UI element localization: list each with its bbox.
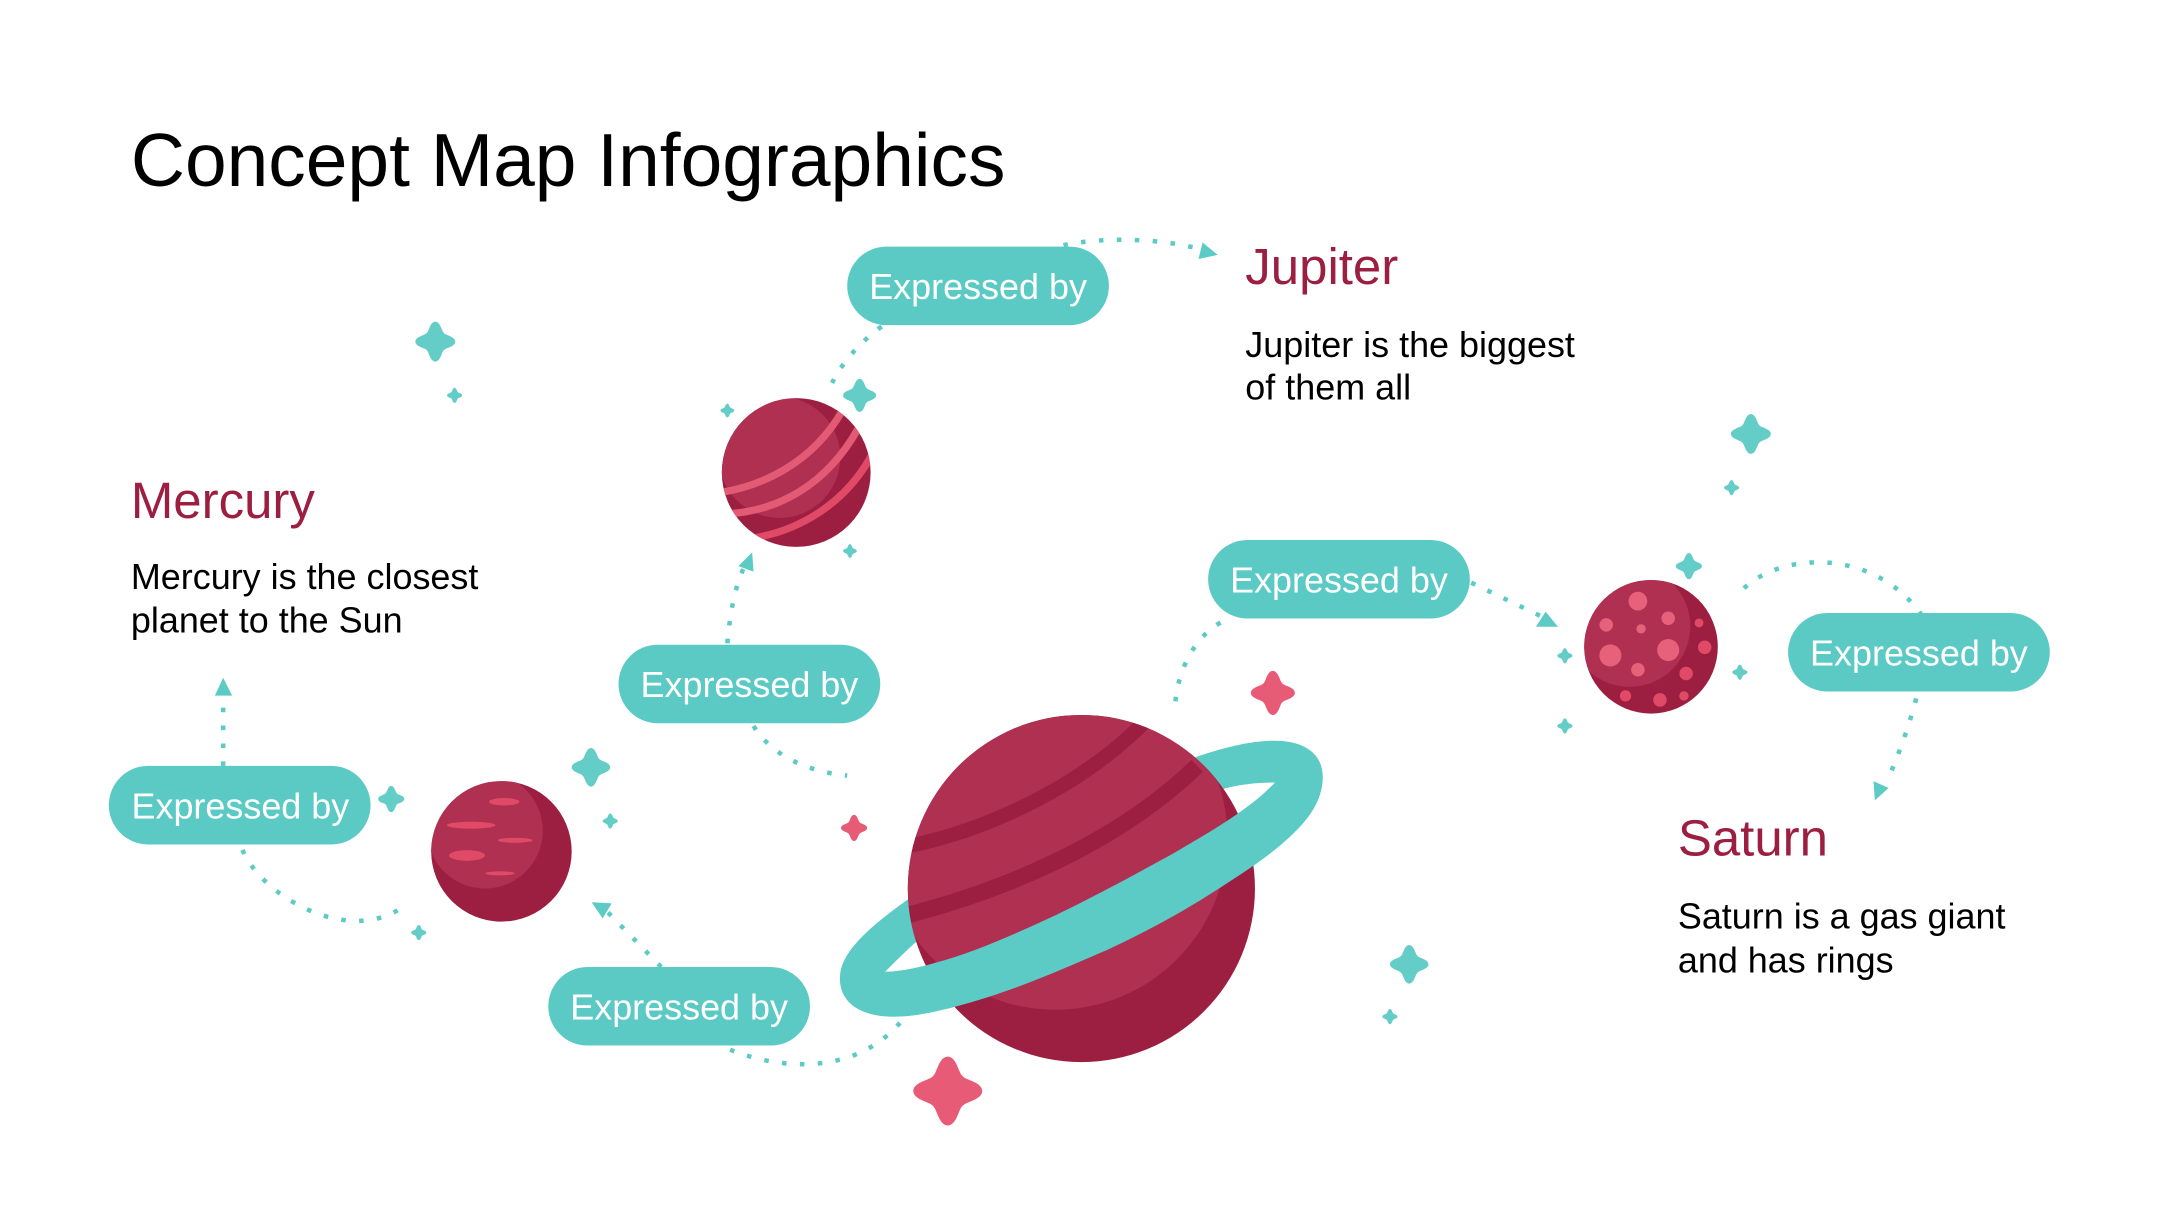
arrow: top pill to Jupiter text [1063, 240, 1218, 259]
pill: Mercury: Expressed by [132, 785, 349, 826]
ring: front band [840, 777, 1323, 1017]
planet: main ringed planet [840, 715, 1323, 1062]
stars: teal sparkles [378, 322, 1771, 1024]
arrow: pill to Mercury text [215, 678, 232, 766]
heading: Saturn: Saturn [1678, 809, 1828, 866]
arrow: far pill to Saturn text [1873, 698, 1916, 800]
pill: right: Expressed by [1230, 559, 1448, 600]
text: Saturn description: Saturn is a gas giant [1678, 895, 2005, 936]
heading: Jupiter: Jupiter [1245, 238, 1398, 295]
text: Saturn description: and has rings [1678, 940, 1894, 981]
planet body [908, 715, 1255, 1062]
pill: Mercury [109, 766, 371, 844]
planet: Saturn [1584, 580, 1718, 714]
text: Mercury description: planet to the Sun [131, 599, 403, 640]
planet: Mercury [427, 773, 572, 922]
title: Concept Map Infographics [131, 118, 1005, 202]
pill: Jupiter: Expressed by [869, 266, 1087, 307]
pill: lower [548, 967, 810, 1046]
pill: Jupiter [847, 247, 1109, 325]
pill: lower: Expressed by [570, 986, 788, 1027]
planet: Jupiter [716, 397, 873, 547]
pill: Saturn [1788, 613, 2050, 692]
arrow: right pill to Saturn planet [1471, 583, 1558, 627]
connector: Mercury pill to planet [242, 850, 399, 921]
text: Jupiter description: Jupiter is the biggest [1245, 324, 1575, 365]
stars: pink sparkles [841, 671, 1295, 1125]
pill: centre [619, 645, 880, 723]
arrow: lower pill to Mercury planet [592, 902, 661, 967]
connector: right pill to main planet [1175, 623, 1221, 705]
connector: Saturn planet to far pill [1744, 562, 1923, 617]
text: Mercury description: Mercury is the closest [131, 556, 478, 597]
pill: centre: Expressed by [641, 664, 858, 705]
connector: lower pill to main planet [730, 1017, 905, 1064]
connector: centre pill to star [754, 726, 847, 776]
text: Jupiter description: of them all [1245, 366, 1411, 407]
pill: Saturn: Expressed by [1810, 632, 2028, 673]
arrow: centre pill to Jupiter planet [727, 552, 754, 643]
heading: Mercury: Mercury [131, 472, 315, 529]
ring: back section [840, 741, 1323, 1017]
ring: inner gap [885, 782, 1275, 972]
connector: top pill to Jupiter planet [832, 326, 882, 383]
pill: right [1208, 540, 1470, 619]
